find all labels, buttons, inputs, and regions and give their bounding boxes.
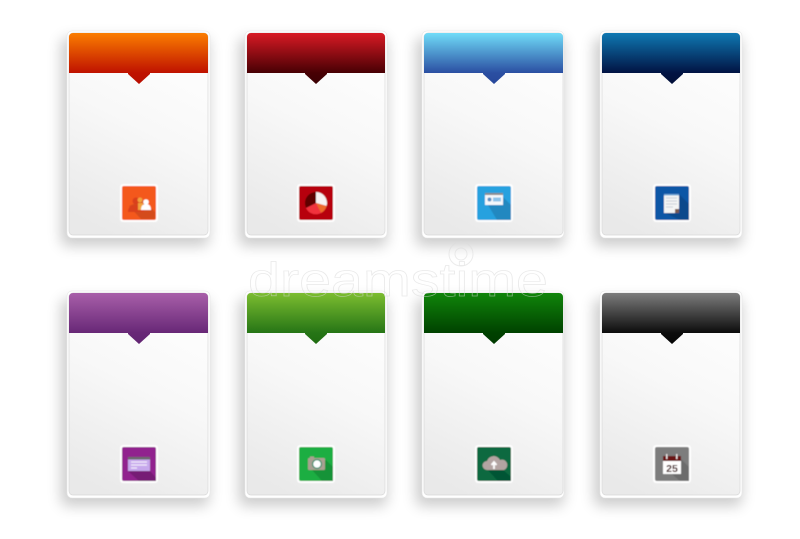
panel: black card <box>594 291 742 506</box>
panel: dark green card <box>416 291 564 506</box>
panel: orange card <box>61 31 210 246</box>
icon: people <box>120 184 158 222</box>
panel: light green card <box>239 291 387 506</box>
icon: camera <box>297 445 335 483</box>
panel: navy card <box>594 31 742 246</box>
icon: browser window <box>120 445 158 483</box>
icon: pie chart <box>297 184 335 222</box>
panel: red card <box>239 31 387 246</box>
panel: light blue card <box>416 31 564 246</box>
icon: cloud upload <box>475 445 513 483</box>
icon: calendar: 25 <box>666 463 678 475</box>
icon: presentation screen <box>475 184 513 222</box>
panel: purple card <box>61 291 210 506</box>
icon: calendar <box>653 445 691 483</box>
watermark: dreamstime <box>248 253 548 306</box>
watermark <box>248 242 548 306</box>
icon: document <box>653 184 691 222</box>
